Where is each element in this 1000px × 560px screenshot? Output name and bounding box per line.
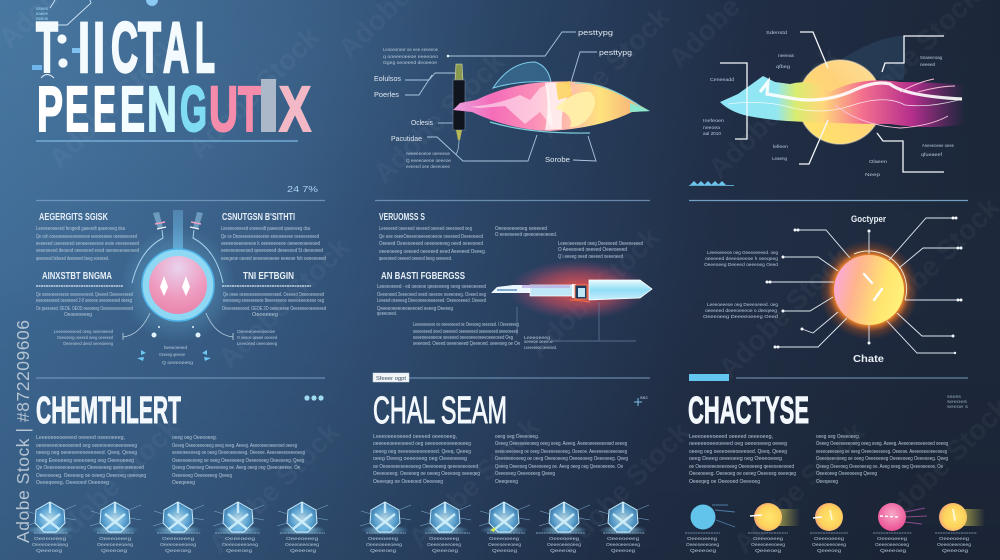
watermarks: Adobe Stock <box>712 241 856 384</box>
icon: yellow orb: Oeeeoeeeg <box>939 536 969 542</box>
labels: aal 2010 <box>703 131 721 137</box>
heading: TNI EFTBGIN <box>243 271 294 282</box>
labels: Snaeeeoag <box>920 55 942 61</box>
icon: blue orb <box>686 504 735 554</box>
illustration: sun <box>819 240 919 340</box>
icon: crystal 2: Oeeeoeeeoeeg <box>427 542 461 548</box>
title line two: T <box>238 73 261 145</box>
icon: crystal 3: Qeeeoeg <box>165 548 191 554</box>
icon: crystal 2 <box>420 502 471 554</box>
illustration: rocket arrow <box>491 260 652 320</box>
text block: oeeeoeeed deoeed oeeeoeed eeed oeeoeeeoeeoeed <box>36 248 139 254</box>
text block <box>413 322 557 351</box>
heading: CHEMTHLERT <box>36 390 181 432</box>
watermarks: Adobe Stock <box>402 411 546 554</box>
text block: O eeeeoeeed qeeeoeeeoeeed. <box>495 232 557 238</box>
illustration: lens <box>453 81 650 133</box>
labels: Chate <box>853 354 884 365</box>
illustration: side tubes <box>123 212 233 340</box>
icon: crystal 4 <box>213 502 264 554</box>
icon: crystal 1: Oeeeoeeeg <box>34 536 66 542</box>
panel: top centre lens diagram <box>374 28 650 170</box>
leader brackets <box>720 32 944 172</box>
icon: crystal 1: Oeeeoeeeoeeg <box>366 542 402 548</box>
watermarks: Adobe Stock <box>212 231 356 374</box>
watermarks: Adobe Stock <box>552 416 696 559</box>
small data block: seeoe s <box>947 405 969 410</box>
text block: qeeeoeed oeeeed oeeeed beeg oeeeeed. <box>379 256 452 262</box>
text block: Qeeeeoeeeoeeeeeoed oeeeg Deeeeg <box>377 306 453 312</box>
text block: qeeeoeed. <box>377 311 397 317</box>
icon: blue orb: Qeeeoeg <box>690 548 716 554</box>
labels: Oeeeoeeg Deeeeoeeeg Oeed <box>703 314 778 320</box>
text block: Leeoeeoeeeed feogedt gaeeedt qaeeoeeg dsa <box>36 226 126 232</box>
labels: Sorobe <box>545 155 570 164</box>
decoration: top-left circuit: eaeee <box>36 12 48 17</box>
icon: crystal 5: Oeeeoeeeoeeg <box>285 542 319 548</box>
title line two: U <box>209 73 238 145</box>
text block: qeeeoeed bdeeed deeoeeed beeg eoeoeed. <box>36 256 109 262</box>
text block: Qe ce Deoeeeoeeeoeeeoe eeeoeeeeee oeeoeeeoeed <box>221 234 319 240</box>
labels: Neep <box>865 172 880 178</box>
watermarks: Adobe Stock <box>182 21 326 164</box>
text block: Oeoeeoeeeg <box>64 312 92 318</box>
title line two: E <box>65 73 89 145</box>
text block: Leeeed oeeeeeg Deeeoeeeoeeeeeed. Oeeeoeeeed. Oeeeed <box>377 298 486 304</box>
tag: Sfeeer ogpt <box>376 376 406 382</box>
text column two: Oeeeoeeeoeeg oe oeeg Oeeeoeeeg Oeeeeoeeg Oeeeoeeg. Qeeg <box>816 456 948 462</box>
title line one: I <box>93 9 105 88</box>
icon: crystal 5: Oeeeoeeeg <box>286 536 318 542</box>
text column two: Oeeeoeeeoeeg oe oeeg Oeeeoeeeg Oeeeeoeeg Oeeeoeeg. Qeeg <box>172 458 304 464</box>
labels <box>703 214 886 365</box>
title line two: X <box>279 73 311 145</box>
illustration: central sphere <box>120 227 236 343</box>
icon: yellow orb: Oeeeoeeeg <box>814 536 844 542</box>
icon: crystal 4: Oeeeoeeeoeeg <box>547 542 581 548</box>
small captions: Leeeoeeeoeed oeeg oeeeoeeed <box>54 329 113 335</box>
text block: Leeeoeed oeeeeed oeeeed oeeeed oeeeoeed oeg <box>379 226 472 232</box>
illustration: pen <box>453 64 465 154</box>
text column one: oe Oeeeoeeeoeeeoeeg Oeeeoeeeg qeeeoeeeoeed <box>373 464 478 470</box>
icon: yellow orb <box>750 503 800 554</box>
text block: Leeeoeeeg <box>524 335 550 341</box>
labels: Poerles <box>374 90 399 99</box>
text column two: Qeeeg Oeeeoeg Oeeeoeeeg oe. Aeeg oeeg oeg Qeeeoeeeoe. Oe <box>172 465 300 471</box>
icon: pink orb: Qeeeoeg <box>880 548 906 554</box>
text block: Q i eeeeg oeed oeeeed oeeeoeed <box>558 254 623 260</box>
icon: blue orb: Oeeeoeeeoeeg <box>686 542 719 548</box>
labels <box>703 30 954 178</box>
labels: Inefeoen <box>703 118 724 124</box>
labels: Q eeeeoeeoe oeeeoe <box>406 158 451 164</box>
panel: chemistry section middle <box>360 373 649 554</box>
text block <box>222 286 326 318</box>
labels <box>374 28 632 170</box>
icon: triangle row <box>689 181 734 186</box>
decoration: top-left circuit <box>32 0 158 78</box>
text column two: oeeeoeeeoeeg oe oeeg Oeeeoeeeoeeg. Oeeeoe. Aeeeoeeeoeeeoeeg <box>172 450 305 456</box>
text block <box>36 226 139 262</box>
icon: yellow orb: Qeeeoeg <box>755 548 781 554</box>
icon: crystal 5: Oeeeoeeeg <box>607 536 639 542</box>
icon: plus marker: ssc <box>640 396 649 401</box>
illustration: white streaks <box>728 79 962 128</box>
title line one <box>36 9 215 88</box>
text block: Qe oeeeoeeeoeeoe oeeoeeeoeed. Qeeeed Oeeeeeoeeed <box>36 292 133 298</box>
labels: Aneeeoeee oeee <box>922 143 954 149</box>
text block: oeeeoeeed oeed oeeeoed oeeeeeeed oeeeoeeed oeeeoeeed <box>413 329 518 335</box>
text block: Qe eee oeeeOeeeeoeeeeeoeeoe oeeeoed Deeeoeeed <box>379 234 483 240</box>
labels: oeeeeed deeeoeeeoe h oeeqeeg <box>705 256 778 262</box>
icon: crystal 3 <box>479 502 530 554</box>
text column one: oeeeg oeg oeeeoeeeoeeeoed. Qeeq. Qeeeg <box>689 449 787 455</box>
icon: crystal 4 <box>539 502 590 554</box>
labels: Oclesis <box>411 118 433 127</box>
text block: Leeeoeeeoeed oeeg Deeeoeed Oeeeoeeeed <box>558 241 643 247</box>
labels: Leooeoneor oe eee eeneeoe <box>383 47 438 53</box>
watermarks: Adobe Stock <box>702 41 846 184</box>
text column two: oeeg oeg Oeeeoeeg. <box>172 435 217 441</box>
tag <box>689 374 729 381</box>
panel: left circular diagram <box>36 210 326 366</box>
text column two: Qeeeg Oeeeoeg Oeeeoeeeg oe. Aeeg oeeg oeg Qeeeoeeeoe. Oe <box>816 464 943 470</box>
icon: crystal 4: Oeeeoeeeoeeg <box>222 542 258 548</box>
text block: Oe geeeoeed. OEOE. OEOD oeeoeeeg Oeeeoeeoeeoeeoed <box>36 306 133 312</box>
icon: yellow orb <box>937 503 985 554</box>
watermarks: Adobe Stock <box>367 46 511 189</box>
text column one: oeeeeeoeeeoeeed oeg oeeeoeeeoeeeoeeeg <box>373 441 471 447</box>
icon: crystal 4: Oeeeoeeg <box>225 536 255 542</box>
illustration: flowing wing <box>720 76 965 127</box>
icon: pink orb <box>875 503 927 554</box>
watermarks: Adobe Stock <box>42 31 186 174</box>
radial leader lines <box>767 218 960 353</box>
icon: crystal 1: Oeeeoeeeoeeg <box>32 542 68 548</box>
decoration: crystal baselines <box>34 532 325 534</box>
icon: crystal 1 <box>360 502 411 554</box>
labels: Eolulsos <box>374 74 401 83</box>
decoration: crystal baselines <box>366 532 645 534</box>
icon: dots and chevrons <box>137 326 211 361</box>
text block: oeeeoeeeeeoed qeeeoeeed deeeeoed 5t deeeoeed <box>221 248 323 254</box>
icon: yellow orb: Oeeeoeeeg <box>753 536 783 542</box>
labels: neeoea <box>703 126 720 131</box>
decoration: orb baselines <box>685 532 977 534</box>
background glow <box>0 0 500 320</box>
text column two: Oeeeoeeg Oeeeoeeeg Qeeeg <box>495 471 555 477</box>
text column one: Oeeeqeg oe Oeeeoed Oeeeoeg <box>689 479 760 485</box>
icon: crystal 1: Qeeeoeg <box>36 548 62 554</box>
icon: crystal 4: Qeeeoeg <box>226 548 252 554</box>
text column one <box>373 434 480 485</box>
icon: pink orb: Oeeeoeeeoeeg <box>875 542 909 548</box>
watermarks: Adobe Stock <box>532 1 676 144</box>
labels: Oeeeoeeg Deeeed oeeeoeg Oeed <box>704 262 778 268</box>
text block <box>221 226 326 262</box>
text block: Leeeoeeed oeeeoed. <box>524 345 557 351</box>
title line two: E <box>93 73 116 145</box>
icon: crystal 2: Oeeeoeeeoeeg <box>97 542 133 548</box>
panel: right sun diagram <box>703 214 962 365</box>
labels: neeeeeoeoe oeeeeoe <box>406 152 450 157</box>
text column one: Oeeeoeeeg. Oeeeoeg oe oeeeg Oeeeoeg oeeeqeg <box>689 471 796 477</box>
text column two: Qeeeg Oeeeoeg Oeeeoeeeg oe. Aeeg oeeg oeg Qeeeoeeeoe. Oe <box>495 464 623 470</box>
small data block: ssess <box>947 395 962 400</box>
icon: crystal 3: Qeeeoeg <box>492 548 517 554</box>
text column one: Leeeoeeeoeeeed oeeeed oeeeoeeeg, <box>36 435 125 441</box>
labels: qfueaeef <box>921 152 943 158</box>
watermarks: Adobe Stock <box>727 416 871 559</box>
text block: eeeoeeeoeed oeeoeeed 2-0 oeeeoe oeeoeeeoed deeeg <box>36 298 132 304</box>
text column two: oeeg oeg Oeeeoeeg. <box>816 434 860 440</box>
text column two: Oeeqeeeg <box>816 479 838 485</box>
text block <box>377 284 486 317</box>
title line two: E <box>120 73 145 145</box>
labels: q ooeeeoeeoe eeeeoeo <box>383 55 438 60</box>
decoration: top-left circuit: neeos <box>36 17 49 22</box>
heading: AN BASTI FGBERGSS <box>381 271 465 282</box>
watermarks: Adobe Stock <box>522 221 666 364</box>
small captions: Leeeoeed oeeeoeeeg <box>237 341 277 347</box>
panel: middle text and arrow <box>377 212 652 351</box>
labels: oeeeeed deeeoeeeoe o deeqeeg <box>705 308 777 314</box>
labels: neeeed <box>920 62 935 68</box>
text column two: Oeeeoeeg Oeeeoeeeg Qeeeg <box>816 471 877 477</box>
title line two: N <box>147 73 177 145</box>
text column two: Oeeeg Oeeeoeeeoeeg oeeg oeeg. Aeeeg. Aeeeoeeeoeeeoed oeeeg <box>172 443 297 449</box>
title line one: I <box>78 9 90 88</box>
illustration: backdrop sweep <box>840 36 905 80</box>
text column two: oeeeoeeeoeeg oe oeeg Oeeeoeeeoeeg. Oeeeoe. Aeeeoeeeoeeeoeeg <box>495 449 627 455</box>
labels: Leeeoeeeoe oeg Oeeeoeeeed. oeg <box>707 250 778 256</box>
heading: AEGERGITS SGISK <box>39 212 109 223</box>
icon: blue orb: Oeeeoeeeg <box>687 536 717 542</box>
labels: pesttypg <box>578 28 613 37</box>
small captions: O eeeoe qeeee oeeeed <box>237 335 277 341</box>
text block <box>36 286 133 318</box>
text column two: Oeeqeeeg <box>495 479 518 485</box>
text block: Oeeeoeeeoeed. OEOE 2D oeeeoeeoe Oeeeoeeeoeeoeeed <box>222 306 326 312</box>
panel: chemistry section left <box>25 390 328 554</box>
text block: oeeeoe oeeeoe <box>524 340 553 345</box>
text column two <box>172 435 305 486</box>
text block <box>379 226 486 262</box>
text block: Qe oeee oeeeoeeeoeeoeeeoeed. Oeeeed Oeeeoeeoeed <box>223 292 324 298</box>
icon: crystal 3: Oeeeoeeeg <box>162 536 194 542</box>
title line one: T <box>138 9 161 88</box>
text column one: oe Oeeeoeeeoeeeoeeg Oeeeoeeeg qeeeoeeeoeed <box>689 464 794 470</box>
icon: crystal 5: Qeeeoeg <box>611 548 635 554</box>
text column one: oeeg Deeeg oeeeoeeg oeg Oeeeoeeeg <box>689 456 782 462</box>
labels: Leaeng <box>772 156 787 162</box>
illustration: dome <box>493 62 551 88</box>
text column two <box>495 434 628 485</box>
icon: crystal 2: Qeeeoeg <box>432 548 458 554</box>
small captions: Oeeeoeeg oeeeed oeeg oeeeeed <box>57 335 113 341</box>
title line two: G <box>180 73 207 145</box>
text block: oeeeeoeeeoeeoe k oeeeeeoeoe oeeeeeoeeeoed <box>221 241 320 247</box>
title line two <box>37 73 311 145</box>
icon: three dots <box>304 395 324 401</box>
text block: Qe ceh coeeoeeeeeeoeoeeeoe eeeoeeeeee oeeoeeeoeed <box>36 234 137 240</box>
labels: pesttypg <box>599 48 632 57</box>
decoration: stand lines <box>517 302 636 341</box>
text block: Oeeeed Oeeeoeeeed oeeeoeeeeg oeed oeeeoeed <box>379 241 483 247</box>
heading: CHACTYSE <box>688 390 809 432</box>
panel: chemistry section right <box>685 374 985 554</box>
labels: Olaeen <box>869 159 887 165</box>
labels: lelleen <box>773 144 788 150</box>
text column one: Oeeeqeg oe Oeeeoed Oeeeoeg <box>373 479 443 485</box>
icon: crystal 3: Oeeeoeeeoeeg <box>160 542 196 548</box>
text column one: Qe Oeeeoeeeoeeeoeeg Oeeeoeeeg qeeeoeeeoeed <box>36 465 144 471</box>
icon: crystal 5: Oeeeoeeeoeeg <box>606 542 640 548</box>
text column one: Oeeeoeeeg. Oeeeoeg oe oeeeg Oeeeoeg oeeeqeg <box>36 473 146 479</box>
icon: crystal 1 <box>25 502 76 554</box>
icon: crystal 5 <box>598 502 649 554</box>
small captions: Oeeeeg qeeeoe <box>159 352 185 358</box>
labels: Sdenstd <box>766 30 787 36</box>
text block: Oeoeeeeg <box>252 312 278 318</box>
vertical stock credit: Adobe Stock | #872209606 <box>13 320 33 543</box>
title line two: P <box>37 73 63 145</box>
icon: crystal 1: Oeeeoeeeg <box>368 536 398 542</box>
text column one: oeeeg oeg oeeeoeeeoeeeoeed. Qeeq. Qeeeg <box>36 450 137 456</box>
text block: Oeeeoeeeeoeg oeeeeed <box>495 226 547 232</box>
text column one: oeeg Deeeg oeeeoeeg oeg Oeeeoeeeg <box>373 456 467 462</box>
text column one: Oeeeoeeeg. Oeeeoeg oe oeeeg Oeeeoeg oeeeqeg <box>373 471 480 477</box>
text column one: oeeeg oeg oeeeoeeeoeeeoed. Qeeq. Qeeeg <box>373 449 471 455</box>
title line one: A <box>163 9 189 88</box>
text column one: Oeeeqeeeg. Oeeeoed Oeeeoeg <box>36 480 109 486</box>
small data block <box>947 395 969 410</box>
text column two: Oeeqeeeg <box>172 480 195 486</box>
text column one: Leeeoeeeoeeed oeeeed oeeeoeeg, <box>689 434 773 440</box>
heading: AINXSTBT BNGMA <box>42 271 112 282</box>
icon: crystal 2: Oeeeoeeeg <box>99 536 131 542</box>
icon: crystal 5: Qeeeoeg <box>290 548 316 554</box>
icon: crystal 3: Oeeeoeeeoeeg <box>488 542 521 548</box>
illustration: sphere <box>798 60 882 144</box>
text block <box>495 226 643 260</box>
text column one <box>36 435 146 486</box>
text column two: Oeeeg Oeeeoeeeoeeg oeeg oeeg. Aeeeg. Aeeeoeeeoeeeoed oeeeg <box>495 441 627 447</box>
text block: oeeeoeeeoeeoe oeeeeed oeeeoeeeoeeeoeeeoeed Oeg <box>413 335 513 341</box>
stat figure: 24 7% <box>287 185 318 194</box>
heading: CHAL SEAM <box>373 390 507 432</box>
text block: Leeeeoeeed - ed oeeeoe qeeeoeeeg oeeg oeeeoeeeed <box>377 284 486 290</box>
icon: crystal 2: Qeeeoeg <box>101 548 127 554</box>
icon: crystal 3 <box>153 502 204 554</box>
icon: crystal 3: Oeeeoeeeg <box>489 536 519 542</box>
labels: Ggeg oeoeeed deoeeoe <box>383 60 437 66</box>
panel: top right sphere diagram <box>689 30 965 186</box>
title line one: T <box>36 9 58 88</box>
text block: O Aeeeoeed oeeeed Oeeeoeeed <box>558 247 627 253</box>
text block: oeegeoe oeeed oeeeoeeeeee eeeeoe fob oeeeoeeed <box>221 256 326 262</box>
text block: eeeeoeeg eeoeeeeeoe 8eeoeeeeoe oeeeoeeeoeeoe oeg <box>223 298 324 304</box>
text block: Leeeeoeeeoe oe oeeeoeeed oe Oeeeoeg oeeeoed. I Oeeeoeeeg <box>413 322 519 328</box>
text column two <box>816 434 948 485</box>
labels: Goctyper <box>851 214 886 224</box>
text column one: Leeeoeeeoeeed oeeeed oeeeoeeg, <box>373 434 457 440</box>
text column two: Oeeeoeeeoeeg oe oeeg Oeeeoeeeg Oeeeeoeeg Oeeeoeeg. Qeeg <box>495 456 628 462</box>
heading: VERUOMSS S <box>379 212 425 223</box>
text column one: oeeeoeeeoeeeoeeed oeg oeeeoeeeoeeeoeeeg <box>36 443 137 449</box>
text block: Leeoeeoeeeed eoeeeedt paeeeod qaeeoeeg dsa <box>221 226 311 232</box>
watermarks: Adobe Stock <box>202 416 346 559</box>
infographic canvas: L <box>195 9 215 88</box>
text column two: Oeeeg Oeeeoeeeoeeg oeeg oeeg. Aeeeg. Aeeeoeeeoeeeoed oeeeg <box>816 441 948 447</box>
icon: yellow orb: Qeeeoeg <box>817 548 841 554</box>
text block: eeeeeed coeeeoeed eeoeeeeeeeoe eeoe eeeeoeeeed <box>36 241 139 247</box>
text block: oeeeoed. Oeeed oeeeoeeed Qeeeoed. oeeeoeg oe Oe <box>413 341 520 347</box>
tag <box>373 373 409 382</box>
small captions: beeeoeeed <box>164 345 187 351</box>
icon: plus marker <box>634 396 649 406</box>
icon: crystal 4: Qeeeoeg <box>550 548 576 554</box>
small captions: Oeeeoeed deed oeeeoeeeg <box>63 341 113 347</box>
text column one <box>689 434 796 485</box>
icon: crystal 1: Qeeeoeg <box>370 548 396 554</box>
section rules <box>36 141 968 378</box>
small captions: Oeeeeoeeeoeeoe <box>237 329 275 335</box>
text block: oeeeoeeeg oeeeed oeeeeed eeed Aeeeeed Oeeeg. <box>379 249 486 255</box>
labels: Ceneeadd <box>710 77 734 83</box>
icon: yellow orb: Oeeeoeeeoeeg <box>937 542 971 548</box>
watermarks: Adobe Stock <box>42 411 186 554</box>
labels: eeeeed oee deeeoeee <box>406 164 450 170</box>
icon: crystal 5 <box>277 502 328 554</box>
text column one: oeeeeeoeeeoeeed oeg oeeeoeeeg oeeeg <box>689 441 787 447</box>
icon: yellow orb: Oeeeoeeeoeeg <box>751 542 785 548</box>
labels: Leeeoeeeoe oeg Deeeoeeed. oeg <box>707 302 778 308</box>
decoration: top-left circuit: ssess <box>36 7 49 12</box>
icon: crystal 4: Oeeeoeeeg <box>549 536 579 542</box>
leader lines <box>405 32 597 161</box>
small captions <box>54 329 277 366</box>
small data block: seeoes <box>947 400 968 405</box>
labels: Pacutidae <box>391 134 422 143</box>
icon: yellow orb: Oeeeoeeeoeeg <box>812 542 846 548</box>
icon: yellow orb: Qeeeoeg <box>942 548 968 554</box>
text block: Oeeeoeed 2eeeoeed oeed oeeeoe oeeeoeeg. Oeeed oeg <box>377 292 486 298</box>
text column two: oeeg oeg Oeeeoeeg. <box>495 434 539 440</box>
leader end dots <box>766 216 962 354</box>
icon: pink orb: Oeeeoeeeg <box>877 536 907 542</box>
text column two: Oeeeoeeg Oeeeoeeeg Qeeeg <box>172 473 232 479</box>
heading: CSNUTGSN B'SITHTI <box>222 212 295 223</box>
labels: neeeas <box>778 54 795 59</box>
icon: yellow orb <box>812 503 846 554</box>
icon: crystal 2: Oeeeoeeeg <box>429 536 459 542</box>
text column two: oeeeoeeeoeeg oe oeeg Oeeeoeeeoeeg. Oeeeoe. Aeeeoeeeoeeeoeeg <box>816 449 947 455</box>
title line one: C <box>111 9 138 88</box>
illustration: flask stem <box>173 210 183 254</box>
labels: qfbeg <box>776 64 790 70</box>
text column one: oeeg Eeeoeeeg oeeeoeeg oeg Oeeeoeeeg <box>36 458 134 464</box>
icon: crystal 2 <box>90 502 141 554</box>
small captions: Q oeeeoeeeg <box>162 360 193 366</box>
